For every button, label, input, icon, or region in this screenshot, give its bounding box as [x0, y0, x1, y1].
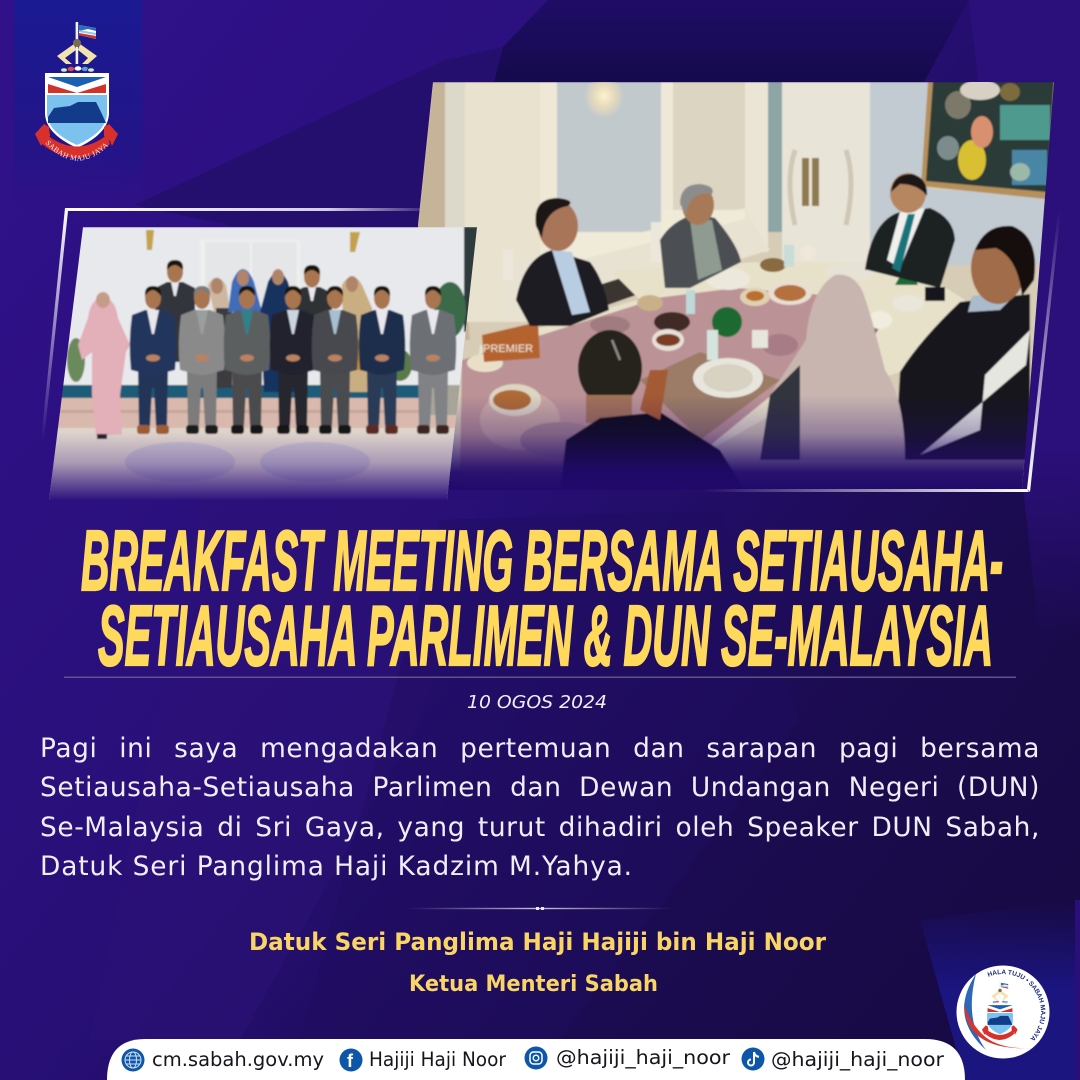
body text: Pagi ini saya mengadakan pertemuan dan sarapan pagi bersama	[40, 733, 1040, 764]
instagram link: @hajiji_haji_noor	[556, 1046, 731, 1069]
guest: left man	[516, 198, 609, 326]
date: 10 OGOS 2024	[467, 692, 607, 713]
title	[81, 514, 1003, 684]
back row of guests	[155, 260, 372, 392]
photo fade	[49, 436, 454, 500]
body text: Setiausaha-Setiausaha Parlimen dan Dewan Undangan Negeri (DUN)	[40, 772, 1040, 803]
signatory name: Datuk Seri Panglima Haji Hajiji bin Haji Noor	[249, 928, 826, 956]
building wall and door	[63, 227, 477, 386]
tissue box	[482, 322, 540, 362]
tableware and food	[467, 245, 945, 416]
social links bar	[107, 1039, 965, 1080]
body text: Se-Malaysia di Sri Gaya, yang turut dihadiri oleh Speaker DUN Sabah,	[40, 812, 1040, 843]
photo: breakfast table meeting	[410, 74, 1060, 492]
photo: group portrait	[40, 227, 480, 503]
emblem lettering: HALA TUJU • SABAH MAJU JAYA	[987, 970, 1046, 1040]
guest: man at right foreground	[895, 226, 1035, 460]
frame: photo 2	[700, 210, 1061, 492]
front row: men in suits	[130, 286, 456, 434]
table and runner	[460, 262, 964, 466]
guest: man seen from behind	[563, 329, 734, 477]
website link: cm.sabah.gov.my	[152, 1048, 324, 1071]
terrace steps and floor	[40, 385, 465, 503]
room walls and door	[410, 74, 1060, 492]
crest: Sabah coat of arms	[35, 22, 118, 161]
facebook link: Hajiji Haji Noor	[369, 1048, 507, 1071]
guest: chief minister with teal tie	[865, 173, 955, 288]
tiktok link: @hajiji_haji_noor	[771, 1048, 945, 1071]
guest: man in grey jacket	[660, 184, 741, 288]
body text	[40, 733, 1040, 882]
photo fade	[448, 400, 1028, 490]
tissue box: PREMIER	[483, 343, 533, 355]
crest motto: SABAH MAJU JAYA	[46, 140, 108, 161]
frame: photo 1	[41, 208, 440, 440]
guest: woman in hijab	[760, 275, 905, 460]
signatory role: Ketua Menteri Sabah	[409, 972, 658, 997]
front row: woman in pink	[78, 292, 130, 439]
painting	[921, 80, 1054, 199]
body text: Datuk Seri Panglima Haji Kadzim M.Yahya.	[40, 851, 633, 882]
decorative blue column behind crest	[14, 0, 142, 210]
facebook link: f	[347, 1051, 354, 1071]
chair backs	[504, 222, 662, 265]
title divider	[64, 676, 1016, 678]
signature divider	[408, 907, 672, 910]
circular emblem	[956, 966, 1050, 1058]
